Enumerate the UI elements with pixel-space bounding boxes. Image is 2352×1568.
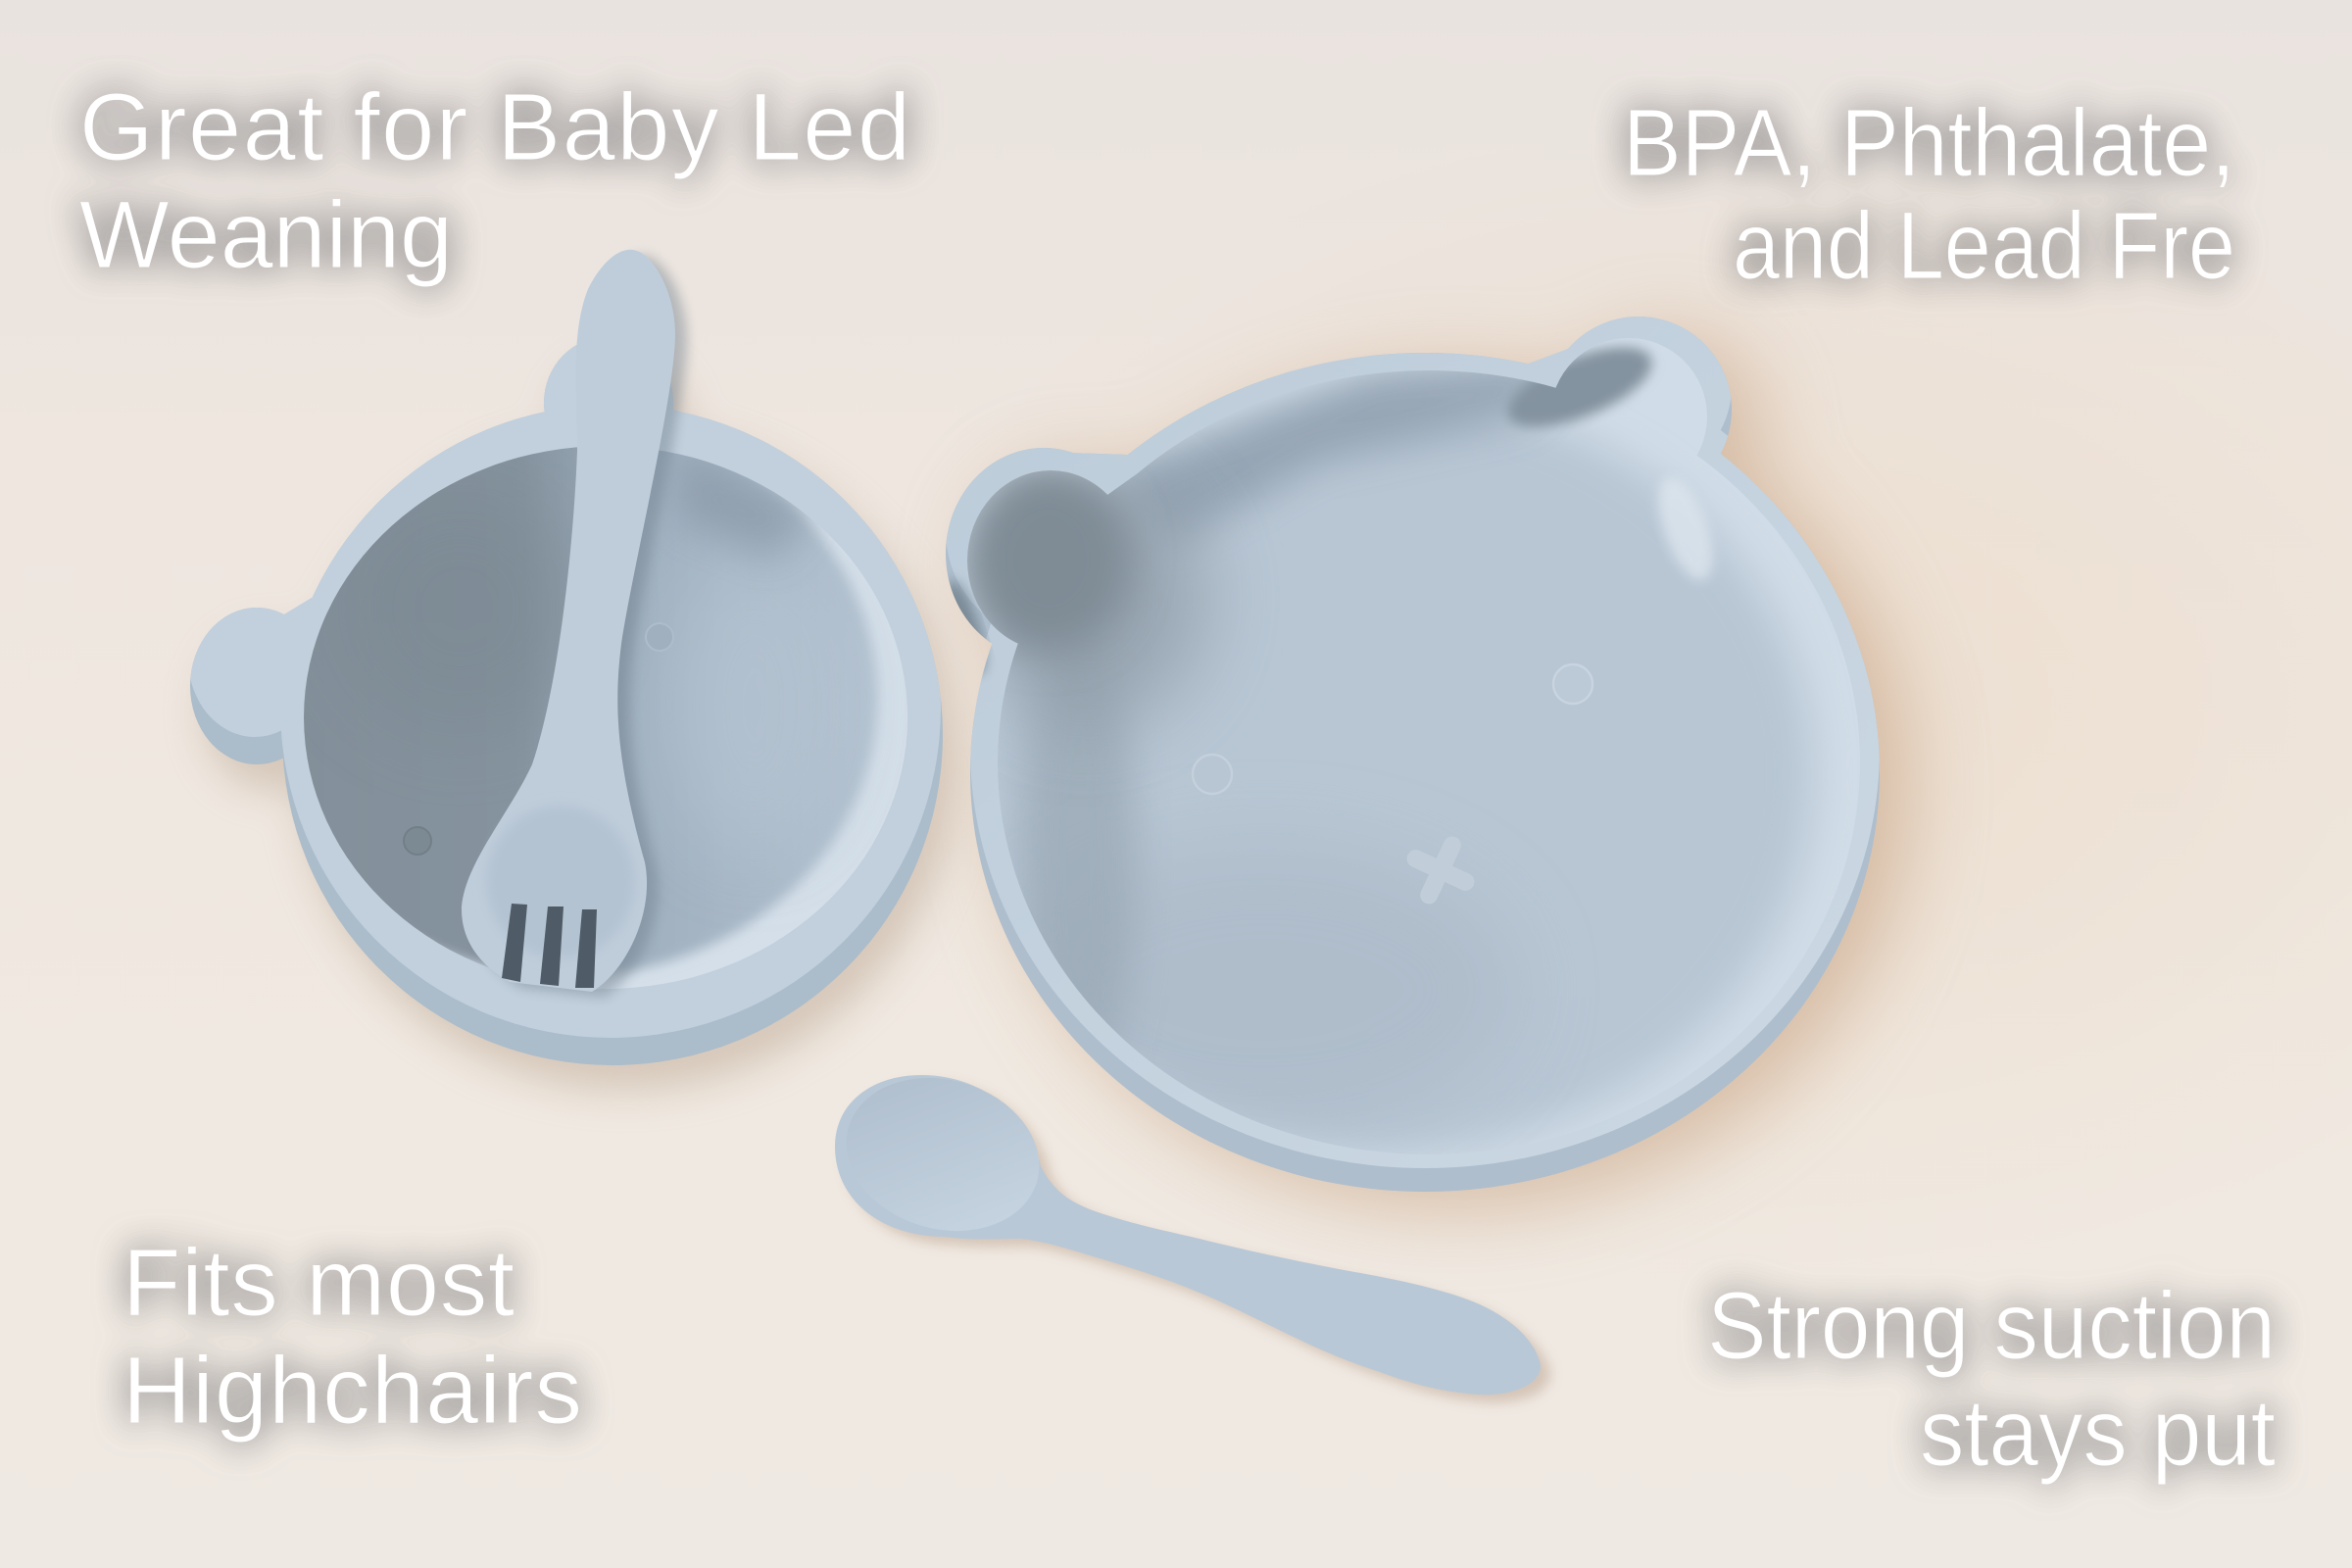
spoon bowl hollow bbox=[828, 1055, 1057, 1253]
plate base and rim bbox=[937, 293, 1880, 1192]
spoon body bbox=[835, 1075, 1541, 1395]
plate nose: embossed cross bbox=[1393, 822, 1489, 918]
label: Great for Baby Led Weaning bbox=[79, 74, 910, 288]
plate eye: right bbox=[1553, 664, 1592, 704]
bowl base and rim bbox=[188, 309, 943, 1065]
label: Great for Baby Led Weaning: Weaning bbox=[79, 181, 453, 288]
baby spoon bbox=[828, 1055, 1541, 1395]
dark hollow of left ear bbox=[970, 470, 1205, 725]
label: BPA, Phthalate, and Lead Free: BPA, Phthalate, bbox=[1623, 89, 2235, 196]
bowl interior bbox=[304, 447, 907, 989]
fork body bbox=[462, 250, 675, 992]
fork bbox=[462, 250, 687, 998]
fork head hollow bbox=[486, 806, 635, 958]
bowl embossed eye lower bbox=[404, 827, 431, 855]
label: Strong suction stays put: stays put bbox=[1920, 1379, 2276, 1486]
label: Fits most Highchairs bbox=[122, 1229, 582, 1444]
fork tines bbox=[502, 904, 597, 988]
label: Fits most Highchairs: Fits most bbox=[122, 1229, 514, 1336]
plate eye: left bbox=[1193, 755, 1232, 794]
label: Strong suction stays put bbox=[1707, 1272, 2276, 1486]
bowl embossed eye bbox=[646, 623, 673, 651]
label: BPA, Phthalate, and Lead Free bbox=[1623, 89, 2235, 299]
bear bowl bbox=[188, 309, 943, 1065]
fork shadow bbox=[473, 256, 687, 998]
label: Great for Baby Led Weaning: Great for Baby Led bbox=[79, 74, 910, 180]
bear plate bbox=[937, 293, 1882, 1192]
label: Strong suction stays put: Strong suction bbox=[1707, 1272, 2276, 1379]
label: BPA, Phthalate, and Lead Free: and Lead Fre bbox=[1733, 192, 2235, 299]
dark hollow of top ear bbox=[1505, 341, 1658, 432]
shadows cast on the surface bbox=[204, 334, 1909, 1402]
plate floor bbox=[951, 314, 1882, 1176]
label: Fits most Highchairs: Highchairs bbox=[122, 1337, 582, 1444]
